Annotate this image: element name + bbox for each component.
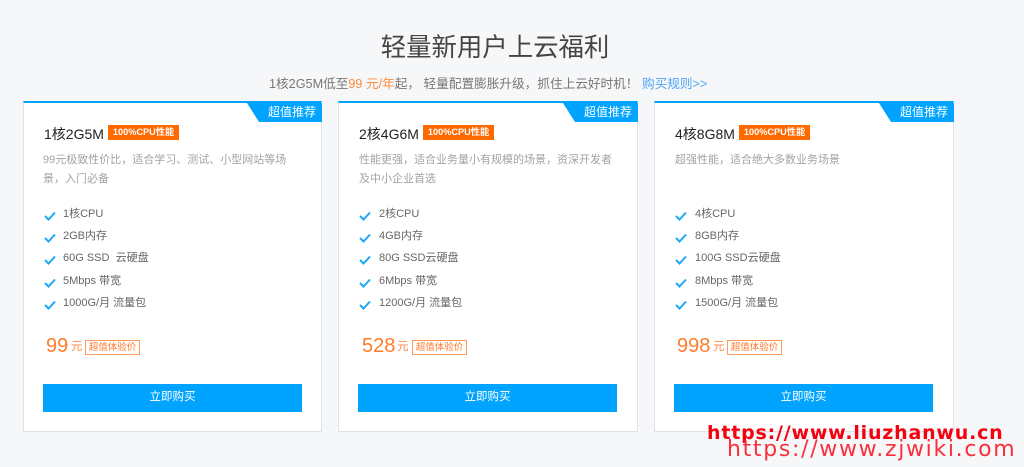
feature: 4核CPU xyxy=(695,208,735,220)
buy button xyxy=(674,384,933,412)
feature: 100G SSD云硬盘 xyxy=(695,252,781,264)
feature: 5Mbps 带宽 xyxy=(63,275,121,287)
price: 元 xyxy=(713,341,724,353)
performance tag: 100%CPU性能 xyxy=(113,127,174,137)
feature: 6Mbps 带宽 xyxy=(379,275,437,287)
description: 景，入门必备 xyxy=(43,173,109,185)
feature list xyxy=(675,208,781,310)
buy button: 立即购买 xyxy=(780,391,826,403)
ribbon: 超值推荐 xyxy=(900,105,948,119)
price: 998 xyxy=(677,335,710,357)
description: 超强性能，适合绝大多数业务场景 xyxy=(675,154,840,166)
ribbon: 超值推荐 xyxy=(268,105,316,119)
feature: 80G SSD云硬盘 xyxy=(379,252,458,264)
feature: 8Mbps 带宽 xyxy=(695,275,753,287)
performance tag: 100%CPU性能 xyxy=(428,127,489,137)
price xyxy=(362,335,467,357)
price xyxy=(46,335,140,357)
performance tag xyxy=(423,125,494,140)
feature list xyxy=(359,208,462,310)
feature: 2GB内存 xyxy=(63,230,107,242)
feature: 8GB内存 xyxy=(695,230,739,242)
feature xyxy=(44,274,121,288)
feature xyxy=(359,230,423,243)
panel: plan 2 xyxy=(338,101,638,432)
feature xyxy=(44,230,107,243)
feature: 1000G/月 流量包 xyxy=(63,297,146,309)
watermark: liuzhanwu: https://www.liuzhanwu.cn xyxy=(707,422,1004,444)
performance tag xyxy=(108,125,179,140)
feature xyxy=(675,230,739,243)
plan name: 4核8G8M xyxy=(675,126,735,142)
buy button xyxy=(358,384,617,412)
feature xyxy=(359,274,437,288)
price: 元 xyxy=(71,341,82,353)
ribbon xyxy=(563,103,638,122)
buy button xyxy=(43,384,302,412)
feature xyxy=(359,208,419,221)
watermark: zjwiki: https://www.zjwiki.com xyxy=(727,437,1016,462)
feature list xyxy=(44,208,149,310)
feature: 1200G/月 流量包 xyxy=(379,297,462,309)
feature: 1500G/月 流量包 xyxy=(695,297,778,309)
price xyxy=(677,335,782,357)
feature xyxy=(675,208,735,221)
feature xyxy=(44,208,103,221)
description: 99元极致性价比，适合学习、测试、小型网站等场 xyxy=(43,154,286,166)
ribbon: 超值推荐 xyxy=(584,105,632,119)
buy button: 立即购买 xyxy=(464,391,510,403)
feature xyxy=(675,274,753,288)
ribbon xyxy=(879,103,954,122)
buy button: 立即购买 xyxy=(150,391,196,403)
title: 轻量新用户上云福利 xyxy=(381,34,609,62)
performance tag xyxy=(739,125,810,140)
feature: 60G SSD 云硬盘 xyxy=(63,252,149,264)
feature: 4GB内存 xyxy=(379,230,423,242)
plan name: 1核2G5M xyxy=(44,126,104,142)
price: 超值体验价 xyxy=(731,342,778,353)
price: 超值体验价 xyxy=(416,342,463,353)
subtitle: 1核2G5M低至99 元/年起， 轻量配置膨胀升级，抓住上云好时机！ 购买规则>> xyxy=(269,77,707,91)
feature: 2核CPU xyxy=(379,208,419,220)
price: 超值体验价 xyxy=(89,342,136,353)
description xyxy=(43,154,286,185)
description: 性能更强，适合业务量小有规模的场景，资深开发者 xyxy=(359,154,612,166)
price: 元 xyxy=(397,341,408,353)
description: 及中小企业首选 xyxy=(359,173,436,185)
plan name: 2核4G6M xyxy=(359,126,419,142)
panel: plan 1 xyxy=(23,101,322,432)
ribbon xyxy=(247,103,322,122)
price: 528 xyxy=(362,335,395,357)
feature: 1核CPU xyxy=(63,208,103,220)
price: 99 xyxy=(46,335,68,357)
description xyxy=(359,154,612,185)
panel: plan 3 xyxy=(654,101,954,432)
performance tag: 100%CPU性能 xyxy=(744,127,805,137)
